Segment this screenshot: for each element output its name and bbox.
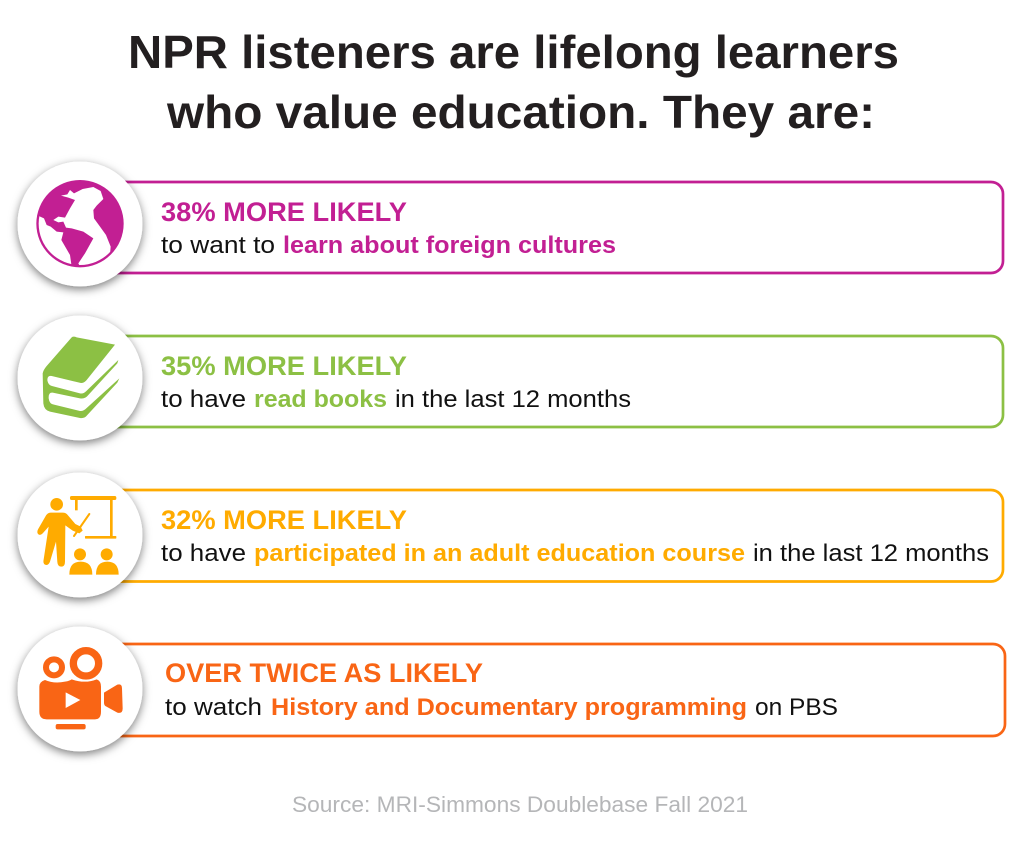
description: read books [161,386,631,413]
panel border: read books [90,336,1003,427]
title [128,26,899,138]
panel border: foreign cultures [90,182,1003,273]
description: foreign cultures: to want to [161,232,275,259]
description: adult education: in the last 12 months [753,540,989,567]
description: documentary programming: to watch [165,694,262,721]
title: who value education. They are: [166,86,875,138]
panel: read books [18,316,1003,440]
statistic: 32% more likely: 32% MORE LIKELY [161,505,407,535]
panel: documentary programming [18,626,1005,752]
description: foreign cultures [161,232,616,259]
panel border: adult education [90,490,1003,582]
panel: foreign cultures [18,162,1003,286]
description: read books: to have [161,386,246,413]
description: documentary programming: on PBS [755,694,838,721]
icon: books [18,316,142,440]
statistic: over twice as likely: OVER TWICE AS LIKELY [165,658,483,688]
title: NPR listeners are lifelong learners [128,26,899,78]
description: foreign cultures: learn about foreign cultures [283,232,616,259]
description: read books: read books [254,386,387,413]
panel: adult education [18,472,1003,598]
panel border: documentary programming [90,644,1005,736]
icon: globe [18,162,142,286]
description: documentary programming: History and Documentary programming [271,694,747,721]
statistic: 38% more likely: 38% MORE LIKELY [161,197,407,227]
source note: Source: MRI-Simmons Doublebase Fall 2021 [292,792,748,817]
description: read books: in the last 12 months [395,386,631,413]
description: adult education [161,540,989,567]
icon: video camera [18,626,142,752]
description: adult education: to have [161,540,246,567]
icon: teacher with students [18,472,142,598]
statistic: 35% more likely: 35% MORE LIKELY [161,351,407,381]
description: adult education: participated in an adult education course [254,540,745,567]
description: documentary programming [165,694,838,721]
